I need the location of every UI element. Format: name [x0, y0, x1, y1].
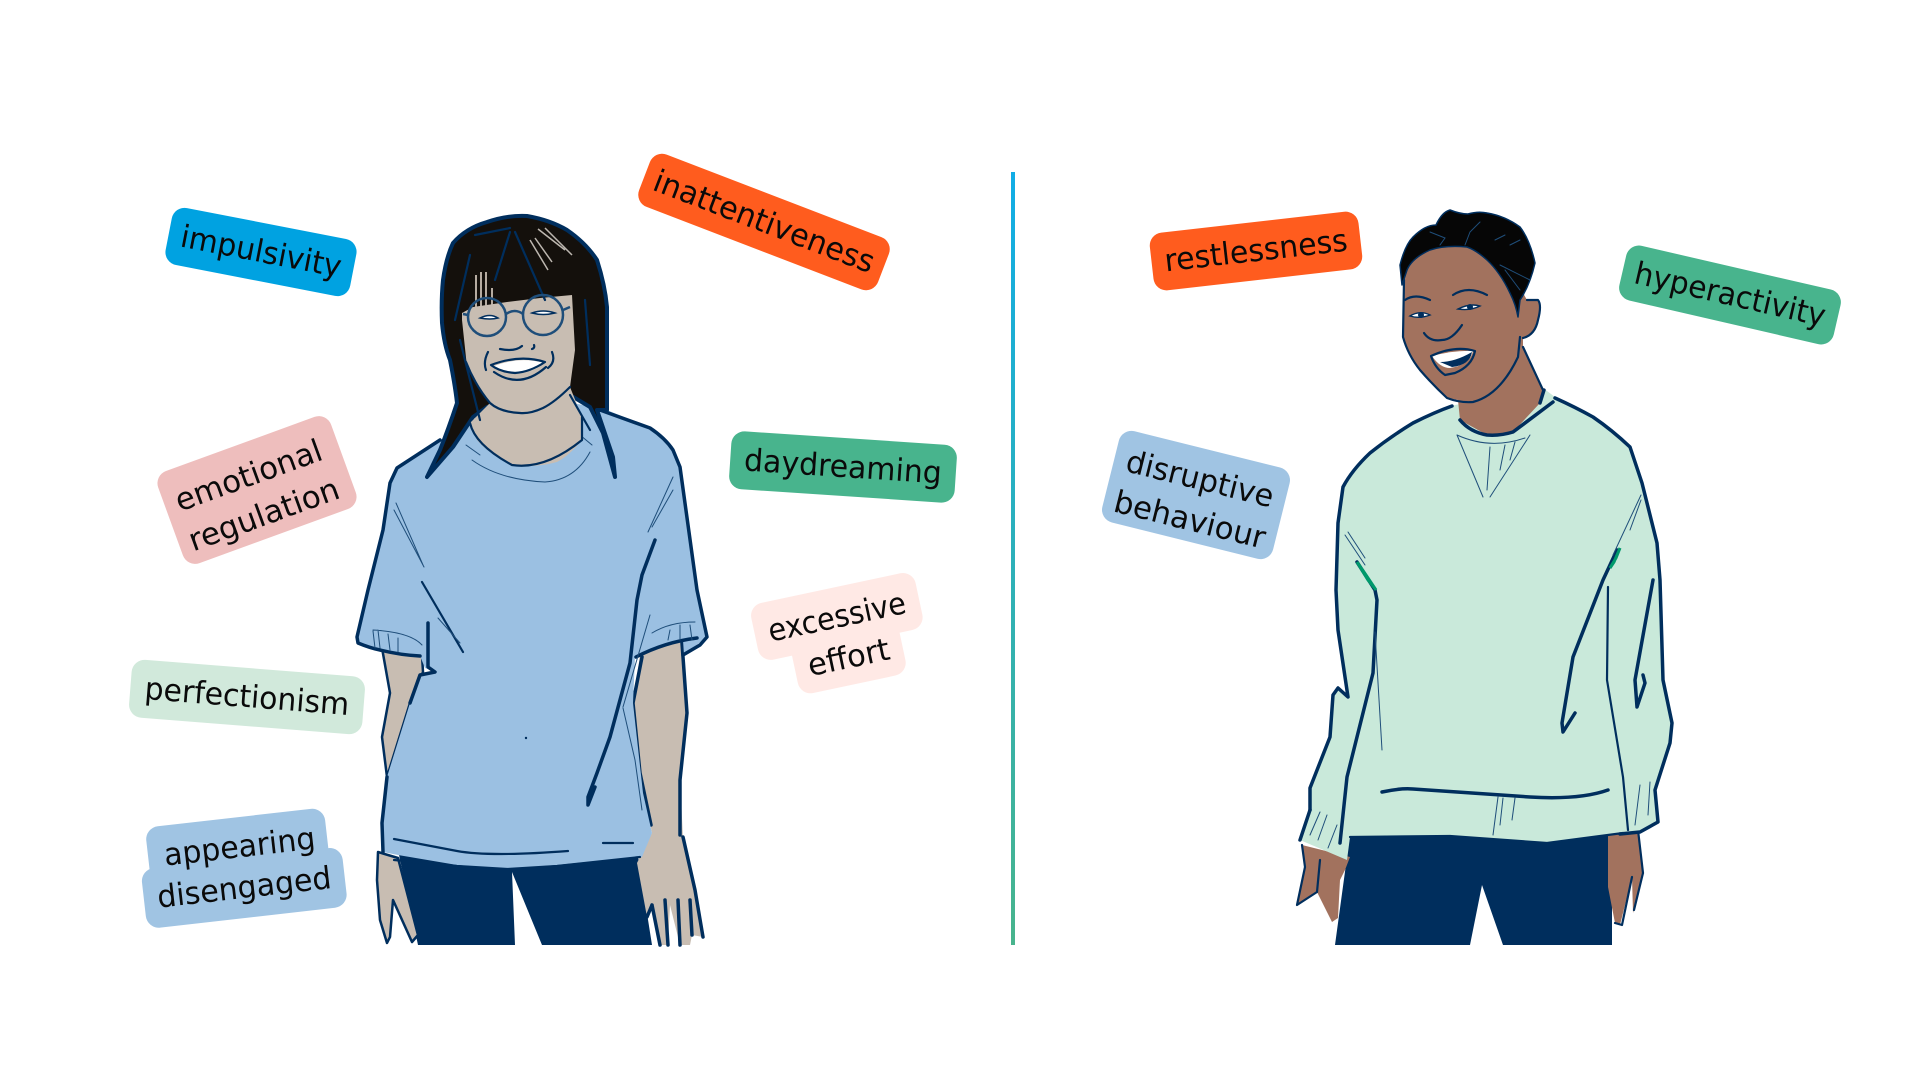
boy neck and face	[1403, 240, 1543, 435]
label: hyperactivity: hyperactivity	[1631, 256, 1829, 334]
boy sweater	[1300, 388, 1672, 860]
label: excessive effort: excessive	[765, 585, 909, 650]
label: restlessness	[1148, 210, 1364, 292]
boy mouth	[1431, 349, 1475, 375]
boy sweater outlines	[1300, 390, 1672, 848]
girl neck	[470, 387, 582, 466]
label: perfectionism: perfectionism	[143, 671, 351, 723]
girl glasses	[463, 295, 570, 336]
label: excessive effort	[749, 571, 934, 702]
label: excessive effort: effort	[804, 632, 893, 684]
label: perfectionism	[128, 659, 366, 735]
girl eyes	[480, 311, 555, 319]
girl t-shirt	[357, 403, 707, 869]
label: restlessness: restlessness	[1163, 223, 1349, 279]
label: emotional regulation	[154, 412, 360, 568]
figure: boy in green sweater	[1297, 210, 1672, 945]
girl nose and mouth	[485, 345, 553, 380]
label: inattentiveness: inattentiveness	[648, 163, 880, 281]
label: daydreaming: daydreaming	[743, 442, 943, 492]
label: daydreaming	[728, 431, 958, 503]
label: disruptive behaviour: disruptive	[1122, 444, 1277, 515]
label: disruptive behaviour	[1099, 428, 1293, 562]
boy hair	[1400, 210, 1535, 317]
girl t-shirt outlines	[357, 410, 707, 869]
girl back hair	[427, 216, 615, 477]
label: disruptive behaviour: behaviour	[1110, 484, 1270, 557]
boy hands	[1297, 830, 1643, 925]
label: emotional regulation: emotional	[170, 433, 327, 519]
boy hair curls	[1430, 222, 1530, 290]
girl face	[462, 295, 575, 413]
girl fringe highlights	[455, 228, 590, 430]
label: appearing disengaged: disengaged	[155, 860, 333, 916]
label: impulsivity	[163, 206, 359, 298]
figure: girl in blue t-shirt	[357, 216, 707, 945]
label: appearing disengaged: appearing	[162, 821, 317, 874]
girl trousers	[398, 850, 652, 945]
label: emotional regulation: regulation	[184, 471, 344, 559]
boy face outlines	[1403, 280, 1543, 402]
label: impulsivity: impulsivity	[178, 219, 344, 285]
label: appearing disengaged	[136, 806, 348, 929]
divider line	[1011, 172, 1015, 945]
boy trousers	[1335, 835, 1612, 945]
girl arms and hands	[377, 640, 703, 945]
